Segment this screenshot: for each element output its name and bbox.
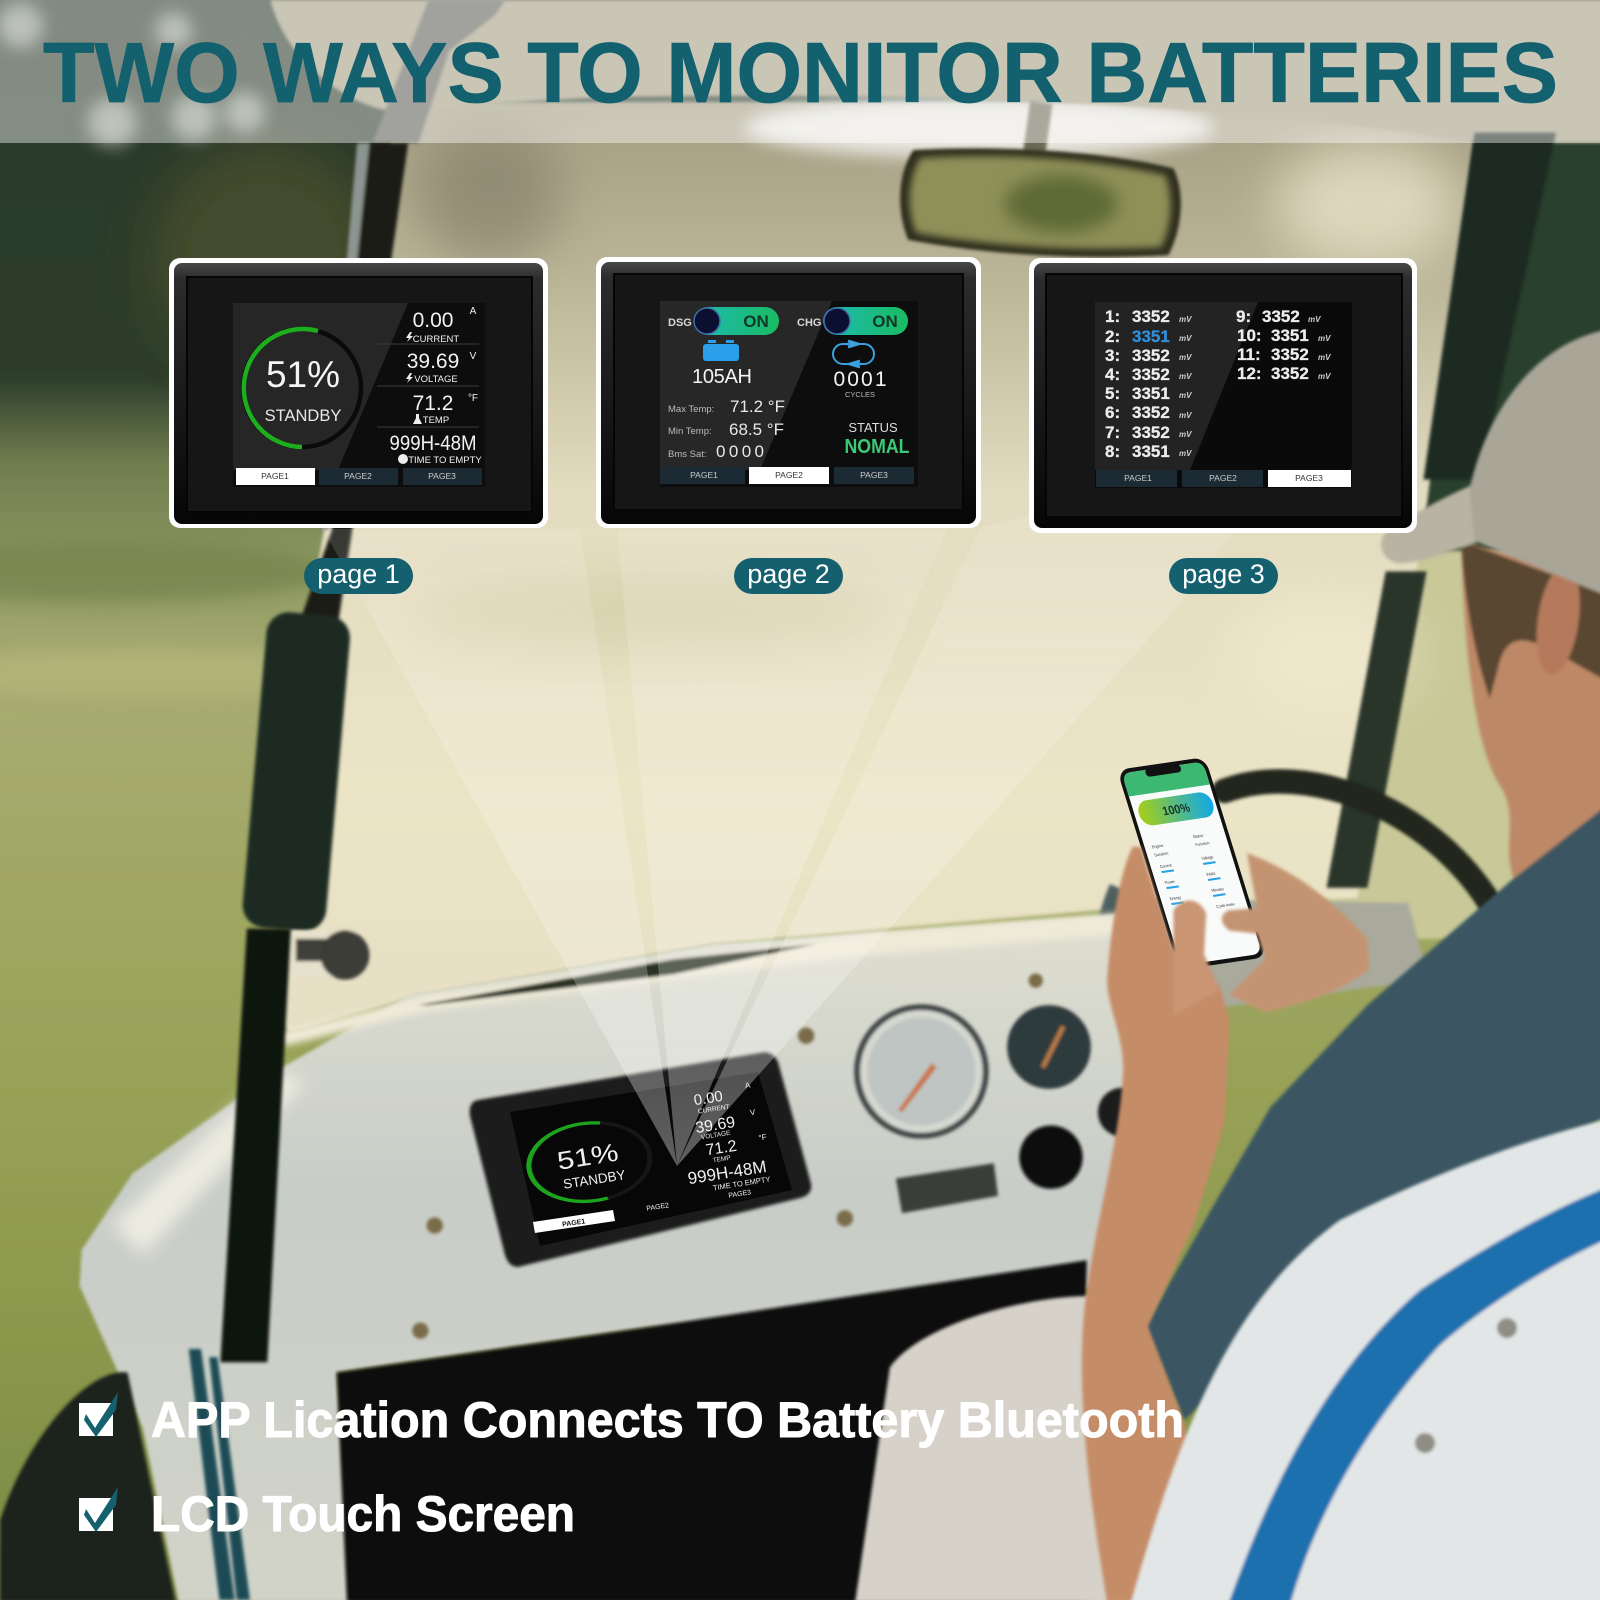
CHG toggle: ON (872, 312, 898, 331)
device housing (1034, 263, 1412, 528)
cell voltages right column: 3351 (1271, 326, 1309, 345)
readings: VOLTAGE (414, 374, 458, 385)
dashboard top ledge (1122, 898, 1429, 1020)
tab labels: PAGE3 (428, 471, 456, 481)
steering wheel (1103, 781, 1490, 1071)
app values (1161, 861, 1226, 905)
small gauge (1007, 1005, 1091, 1089)
panel: page 1 display (169, 258, 548, 528)
wheel and tyre (0, 1372, 176, 1600)
app data rows: Current (1159, 862, 1173, 869)
temperature readings: Max Temp: (668, 404, 714, 415)
DSG toggle: DSG (668, 317, 692, 329)
cycle icon (833, 341, 874, 367)
readings: TEMP (423, 415, 449, 426)
percent: 51% (266, 354, 340, 395)
page tabs (236, 468, 315, 485)
monitor screen (510, 1072, 792, 1246)
charge ring (243, 329, 361, 447)
panel: page 3 display (1029, 258, 1417, 533)
device housing (601, 262, 976, 524)
app data rows: Energy (1169, 894, 1182, 901)
monitor housing (470, 1052, 811, 1267)
screen (233, 303, 485, 487)
cell voltages right column: 3352 (1271, 345, 1309, 364)
cart white body and dashboard (80, 913, 1153, 1600)
monitor readings: CURRENT (698, 1104, 730, 1115)
cell voltages right column: 12: (1237, 364, 1262, 383)
bezel (1046, 274, 1402, 517)
cap crown (1469, 329, 1600, 598)
temperature readings: Bms Sat: (668, 449, 707, 460)
icon: checkbox 2 (79, 1487, 118, 1532)
millivolt units: mV (1179, 372, 1192, 381)
readings: 999H-48M (390, 432, 476, 455)
cell voltages left column: 3352 (1132, 307, 1170, 326)
A-pillar lower (220, 929, 291, 1362)
driver (855, 329, 1600, 1600)
page 2 pill (734, 558, 843, 594)
CHG toggle (797, 307, 908, 335)
millivolt units: mV (1179, 353, 1192, 362)
cell voltages left column: 3351 (1132, 327, 1170, 346)
cell voltages right column: 3352 (1262, 307, 1300, 326)
device housing (174, 263, 543, 524)
charge ring (525, 1117, 654, 1207)
monitor readings: 0.00 (693, 1088, 724, 1109)
millivolt units: mV (1179, 391, 1192, 400)
cell voltages right column: 3352 (1271, 364, 1309, 383)
tab labels (1124, 473, 1323, 483)
DSG toggle (668, 307, 779, 335)
readings: °F (468, 393, 478, 404)
left thumb (1173, 901, 1219, 1015)
title: TWO WAYS TO MONITOR BATTERIES (43, 26, 1558, 121)
cell voltages left column: 3352 (1132, 423, 1170, 442)
cell voltages left column: 2: (1105, 327, 1120, 346)
percent label: 100% (1161, 801, 1192, 818)
cell voltages left column: 1: (1105, 307, 1120, 326)
status: STATUS (848, 420, 898, 435)
cell voltages left column (1105, 307, 1170, 461)
cell voltages left column: 3352 (1132, 365, 1170, 384)
monitor readings: PAGE2 (646, 1202, 670, 1213)
rear-view mirror (900, 101, 1181, 257)
app data rows: Status: (1192, 832, 1205, 839)
smartphone with battery app (1117, 757, 1267, 970)
cell voltages left column: 3352 (1132, 403, 1170, 422)
screen (1095, 302, 1352, 488)
monitor readings: VOLTAGE (701, 1130, 732, 1141)
readings: 0.00 (413, 309, 453, 332)
cell voltages left column: 5: (1105, 384, 1120, 403)
monitor readings: A (744, 1081, 752, 1090)
panel: page 2 display (596, 257, 981, 528)
app data rows: Function: (1195, 840, 1211, 847)
light beam to page 3 (677, 440, 1300, 1166)
right hand fingers (1222, 853, 1369, 1012)
status (844, 420, 910, 458)
app data rows: Duration: (1154, 850, 1169, 857)
page tabs (660, 467, 745, 484)
roof strut (372, 0, 505, 143)
neck and head (1461, 541, 1600, 883)
screen (660, 301, 918, 487)
dashboard LCD monitor (470, 1052, 811, 1267)
temperature readings: 68.5 °F (729, 420, 784, 439)
cell voltages left column: 3: (1105, 346, 1120, 365)
temperature readings: Min Temp: (668, 426, 712, 437)
cell voltages left column: 3351 (1132, 442, 1170, 461)
cell voltages right column (1236, 307, 1309, 383)
millivolt units: mV (1179, 430, 1192, 439)
light beam to page 2 (617, 529, 947, 1166)
monitor readings: PAGE3 (728, 1189, 752, 1200)
temperature readings: 71.2 °F (730, 397, 785, 416)
DSG toggle: ON (743, 312, 769, 331)
dash knobs and switch panel (896, 1088, 1147, 1213)
speedometer gauge (854, 1004, 989, 1139)
tab labels: PAGE3 (1295, 473, 1323, 483)
hands holding phone (1082, 847, 1369, 1600)
millivolt units (1179, 315, 1331, 458)
notch (1144, 764, 1182, 777)
dash rivets (412, 973, 1043, 1339)
temperature readings (668, 397, 785, 461)
trousers (855, 1296, 1143, 1600)
right pillar (1327, 133, 1556, 888)
app header (1122, 762, 1210, 796)
tab labels: PAGE2 (1209, 473, 1237, 483)
feature text: app connection: APP Lication Connects TO Battery Bluetooth (151, 1392, 1184, 1448)
battery percent pill (1135, 791, 1217, 827)
cell voltages left column: 3352 (1132, 346, 1170, 365)
app data rows: Power (1164, 878, 1176, 885)
tab labels (261, 471, 456, 481)
windshield mount knob (288, 931, 369, 980)
left hand and forearm (1082, 847, 1230, 1600)
millivolt units: mV (1179, 334, 1192, 343)
app data rows (1150, 831, 1236, 915)
tab labels: PAGE2 (344, 471, 372, 481)
app data rows: Voltage (1201, 854, 1214, 861)
cell voltages right column: 9: (1236, 307, 1251, 326)
status: NOMAL (844, 436, 910, 458)
feature text: touch screen: LCD Touch Screen (151, 1486, 575, 1542)
blue stripe (1228, 1188, 1600, 1600)
millivolt units: mV (1318, 334, 1331, 343)
temperature readings: 0000 (716, 442, 764, 461)
standby label: STANDBY (265, 407, 341, 425)
tab labels: PAGE3 (860, 470, 888, 480)
page tabs (1096, 470, 1177, 487)
page 1 pill: page 1 (317, 559, 400, 589)
monitor readings: 39.69 (694, 1114, 736, 1137)
active tab label: PAGE1 (562, 1218, 586, 1229)
hair (1461, 541, 1600, 699)
dividers (377, 344, 479, 427)
seat bolts (1415, 1318, 1517, 1453)
monitor readings: °F (758, 1132, 767, 1143)
A-pillar upper (241, 143, 408, 933)
page 3 pill (1169, 558, 1278, 594)
reading icons (398, 332, 422, 464)
app data rows: Engine: (1151, 843, 1165, 849)
tab labels: PAGE1 (690, 470, 718, 480)
page 3 pill: page 3 (1182, 559, 1265, 589)
readings: V (470, 351, 477, 362)
cell voltages left column: 7: (1105, 423, 1120, 442)
readings (390, 306, 482, 466)
monitor readings (555, 1081, 771, 1213)
monitor readings: TIME TO EMPTY (712, 1175, 771, 1193)
shirt (1145, 801, 1600, 1420)
readings: CURRENT (413, 334, 459, 345)
tab labels: PAGE2 (775, 470, 803, 480)
cell voltages left column: 8: (1105, 442, 1120, 461)
page 2 pill: page 2 (747, 559, 830, 589)
body side stripes (189, 1349, 250, 1600)
golf cart seat with blue stripe (1130, 1120, 1600, 1600)
cell voltages left column: 6: (1105, 403, 1120, 422)
millivolt units: mV (1179, 315, 1192, 324)
bokeh highlights in trees (0, 3, 265, 147)
monitor readings: 51% (555, 1138, 620, 1175)
icon: checkbox 1 (79, 1392, 118, 1437)
black interior footwell (337, 1260, 1087, 1600)
readings: A (470, 306, 477, 317)
cell voltages right column: 10: (1237, 326, 1262, 345)
cap brim (1381, 482, 1490, 563)
light beam to page 1 (323, 529, 677, 1166)
monitor readings: V (749, 1108, 757, 1117)
monitor active tab (533, 1210, 615, 1233)
page 1 pill (304, 558, 413, 594)
tab labels: PAGE1 (1124, 473, 1152, 483)
millivolt units: mV (1318, 353, 1331, 362)
millivolt units: mV (1179, 449, 1192, 458)
cell voltages left column: 4: (1105, 365, 1120, 384)
battery icon (703, 340, 739, 361)
readings: 39.69 (407, 350, 459, 373)
bezel (187, 277, 532, 512)
monitor readings: TEMP (712, 1155, 731, 1164)
readings: TIME TO EMPTY (408, 455, 482, 466)
millivolt units: mV (1308, 315, 1321, 324)
tab labels (690, 470, 888, 480)
app data rows: Watts (1206, 871, 1216, 877)
tab labels: PAGE1 (261, 471, 289, 481)
capacity: 105AH (692, 366, 752, 388)
cell voltages left column: 3351 (1132, 384, 1170, 403)
monitor readings: STANDBY (562, 1167, 626, 1192)
millivolt units: mV (1179, 411, 1192, 420)
CHG toggle: CHG (797, 317, 821, 329)
readings: 71.2 (413, 392, 453, 415)
title band (0, 0, 1600, 143)
ear (1530, 563, 1586, 678)
cycles label: CYCLES (845, 390, 875, 399)
bezel (614, 274, 963, 510)
roof canopy (270, 0, 1600, 143)
windshield (278, 97, 1480, 1033)
app data rows: Cycle Index (1216, 901, 1236, 909)
app data rows: Minutes (1211, 886, 1225, 893)
cycles count: 0001 (834, 368, 886, 391)
monitor readings: 999H-48M (686, 1157, 768, 1188)
monitor readings: 71.2 (705, 1138, 738, 1159)
cell voltages right column: 11: (1237, 345, 1261, 364)
millivolt units: mV (1318, 372, 1331, 381)
